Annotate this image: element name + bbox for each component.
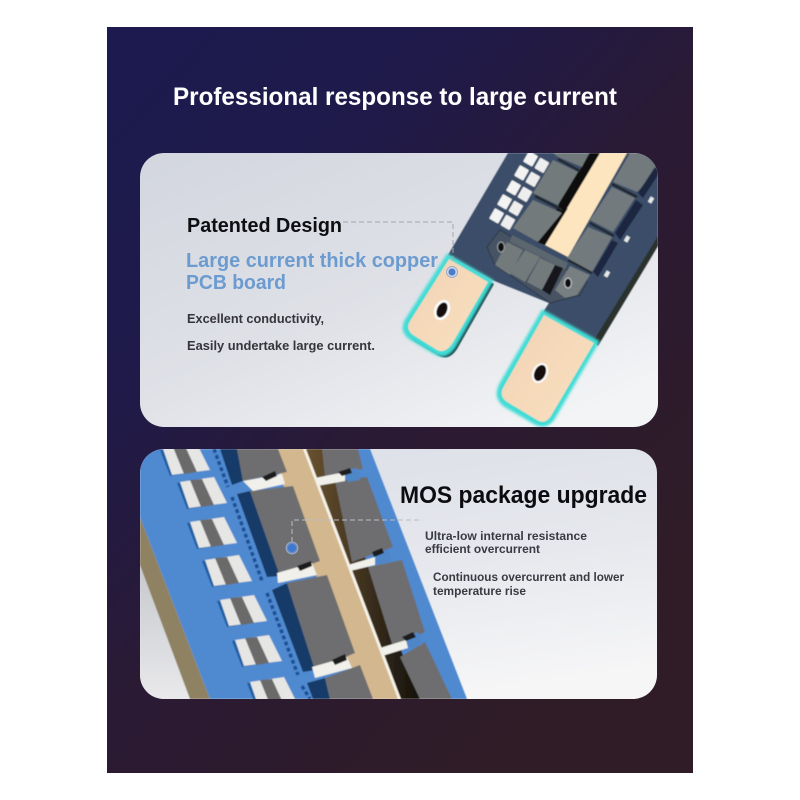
tan copper strip [270, 449, 400, 699]
black clip caps [262, 468, 416, 665]
right copper terminal [499, 312, 597, 425]
white pin ends [604, 196, 654, 278]
callout dot [446, 266, 458, 278]
panel: MOS package upgrade [140, 444, 657, 709]
MOS chips, right row [567, 153, 658, 272]
text block: conductivity: Excellent conductivity, [187, 311, 324, 326]
illustration: PCB with two copper terminals [405, 151, 658, 425]
MOS chips, left row [513, 153, 589, 242]
blue pin bases [345, 468, 422, 649]
heading: MOS package upgrade: MOS package upgrade [400, 482, 647, 509]
left copper terminal [405, 256, 494, 357]
title: Professional response to large current [173, 83, 618, 111]
panel: thick copper PCB board [140, 151, 658, 427]
dark pin rows [593, 167, 658, 277]
subheading: large current thick copper PCB board: Large current thick copper [186, 249, 438, 272]
background panel [107, 27, 693, 773]
subheading: large current thick copper PCB board: PCB board [186, 271, 286, 294]
callout line [343, 222, 453, 264]
text block: conductivity: Easily undertake large current. [187, 338, 375, 353]
dark channel and white line [305, 449, 420, 699]
small white pads [160, 444, 297, 709]
illustration: close-up of MOS board [140, 444, 467, 709]
copper trace [545, 153, 627, 257]
text block: low resistance: efficient overcurrent [425, 544, 540, 556]
dark heat sink strips [220, 449, 330, 699]
chip leg marks [535, 159, 637, 273]
right MOS blocks [322, 449, 452, 699]
text block: temperature rise [433, 572, 625, 598]
subheading: large current thick copper PCB board [186, 249, 438, 294]
text block: temperature rise: temperature rise [433, 586, 526, 598]
left MOS blocks [237, 449, 373, 699]
small SMD pads [489, 151, 549, 230]
heading: Patented Design: Patented Design [187, 215, 342, 237]
text block: low resistance: Ultra-low internal resistance [425, 531, 587, 543]
dashed pin rows [214, 449, 310, 699]
callout line [292, 520, 420, 542]
callout dot [286, 542, 298, 554]
text block: conductivity [187, 311, 375, 353]
central housing [487, 230, 590, 303]
white clip legs [243, 472, 408, 678]
text block: low resistance [425, 531, 587, 556]
chip shadow strips [540, 172, 580, 244]
text block: temperature rise: Continuous overcurrent and lower [433, 572, 625, 584]
